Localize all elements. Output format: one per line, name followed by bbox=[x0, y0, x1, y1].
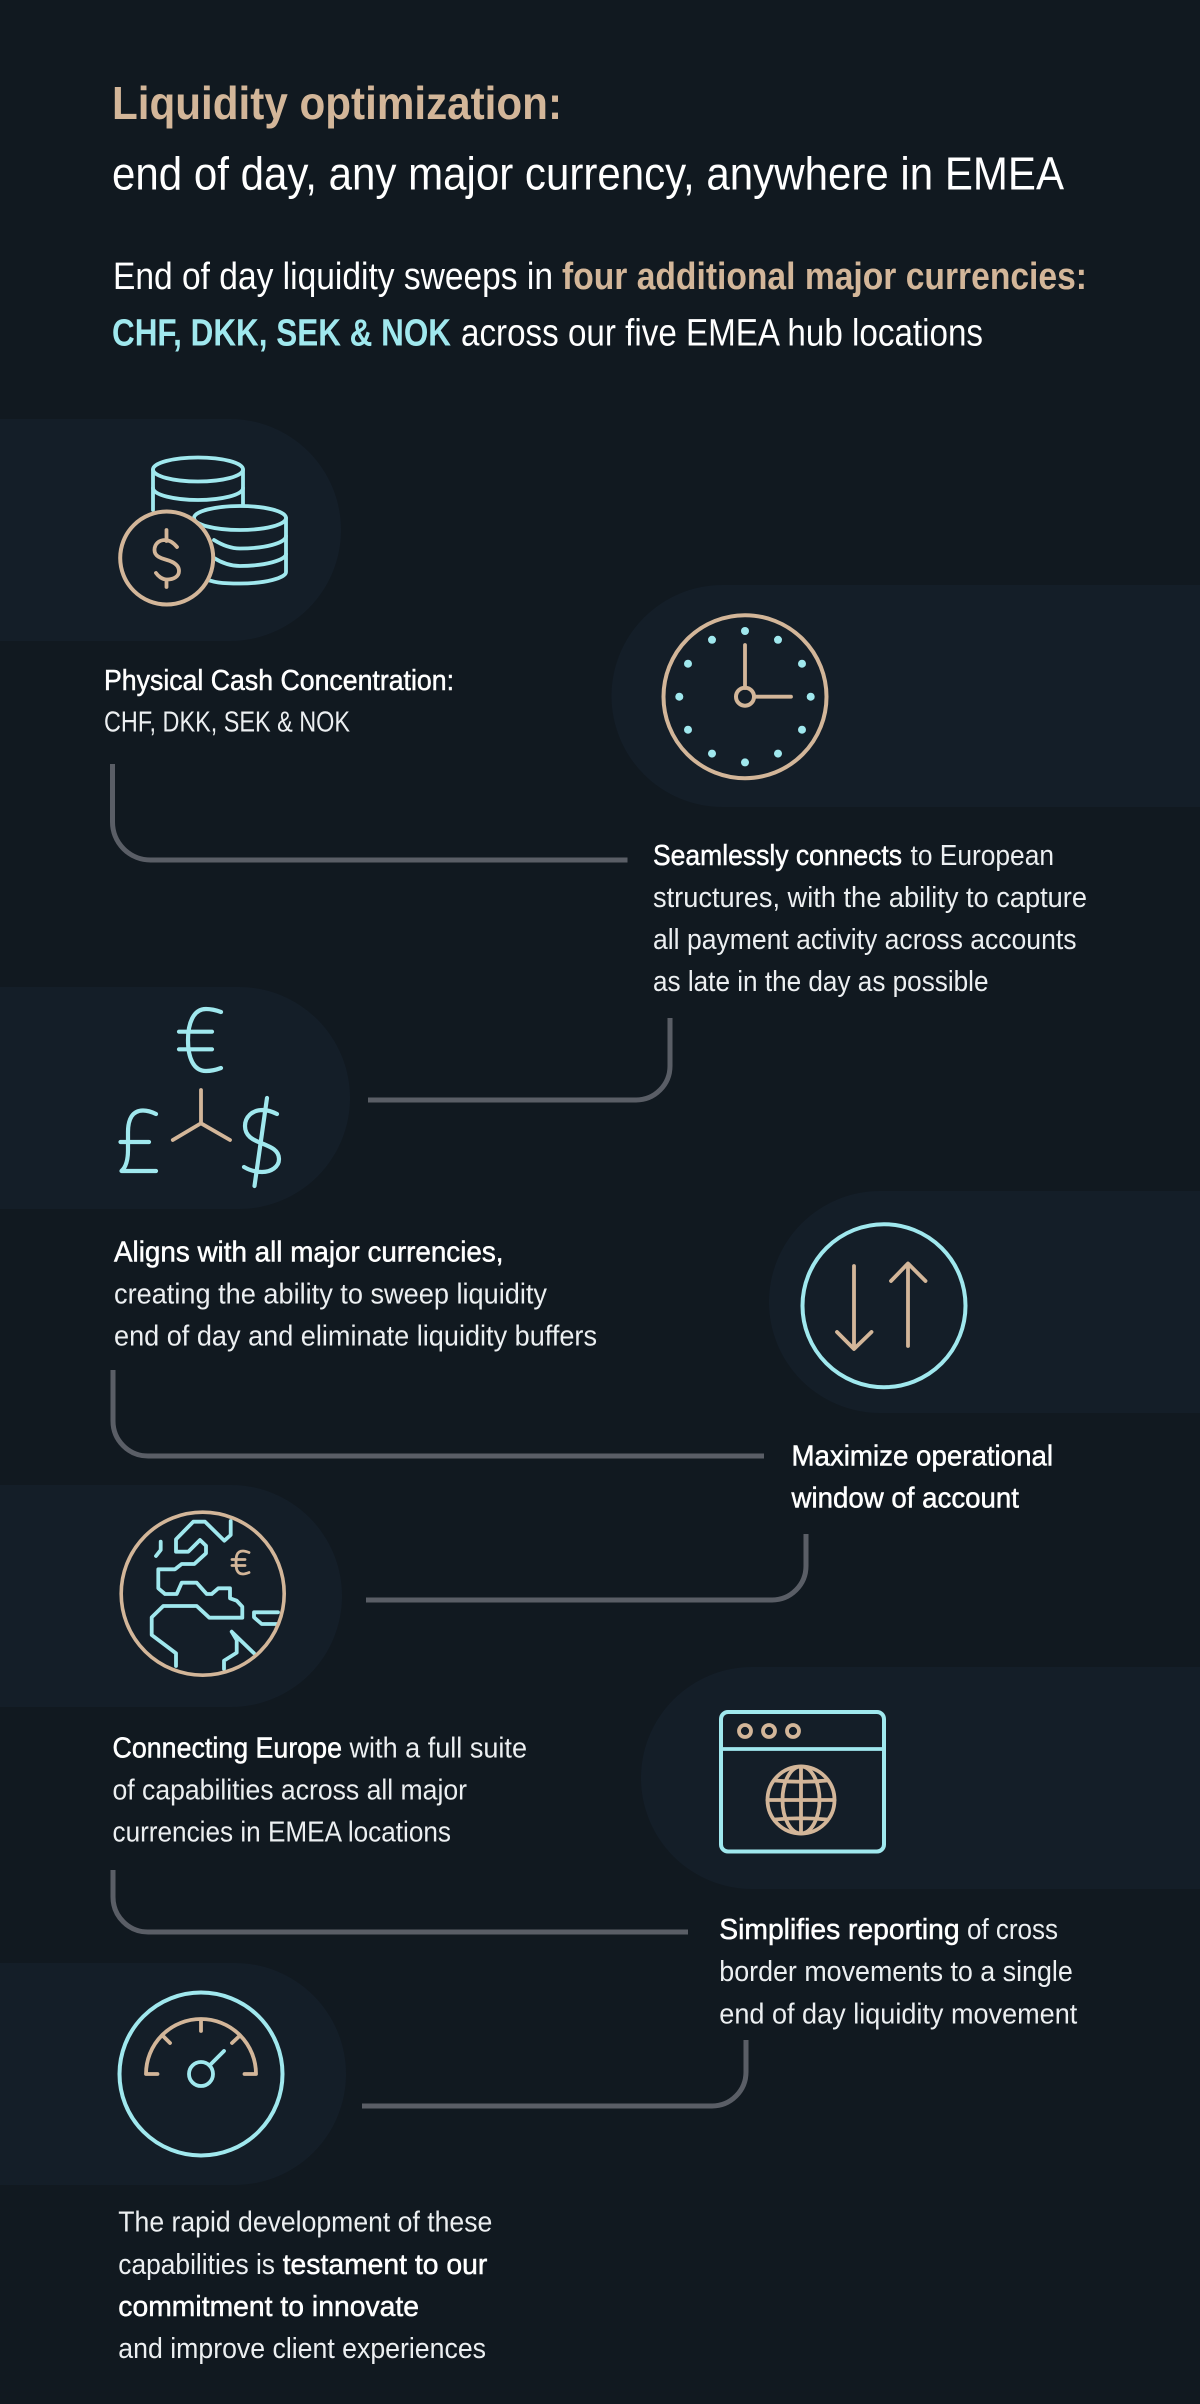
panel background bbox=[0, 987, 350, 1209]
icon: up and down arrows bbox=[802, 1224, 966, 1387]
panel background bbox=[0, 1485, 342, 1707]
panel: connecting europe bbox=[0, 1485, 527, 1849]
icon: currency symbols bbox=[120, 1009, 279, 1186]
text: maximize operational window: Maximize operational bbox=[792, 1441, 1053, 1473]
icon: globe with euro bbox=[121, 1512, 284, 1675]
text: commitment to innovate: The rapid development of these bbox=[118, 2207, 492, 2239]
panel: aligns with all major currencies bbox=[0, 987, 597, 1353]
text: connecting europe: with a full suite bbox=[349, 1733, 527, 1765]
connector arrow 2 bbox=[368, 1018, 670, 1100]
panel background bbox=[0, 1963, 346, 2185]
text: aligns with all major currencies: creating the ability to sweep liquidity bbox=[114, 1278, 547, 1310]
text: connecting europe: currencies in EMEA locations bbox=[112, 1817, 451, 1849]
text: aligns with all major currencies: end of day and eliminate liquidity buffers bbox=[114, 1321, 597, 1353]
text: commitment to innovate: testament to our bbox=[283, 2249, 488, 2281]
panel: physical cash concentration bbox=[0, 419, 454, 739]
text: commitment to innovate bbox=[118, 2207, 492, 2365]
panel: commitment to innovate bbox=[0, 1963, 492, 2365]
text: physical cash concentration: CHF, DKK, SEK & NOK bbox=[104, 707, 351, 739]
text: commitment to innovate: commitment to innovate bbox=[118, 2291, 419, 2323]
text: connecting europe: Connecting Europe bbox=[112, 1733, 342, 1765]
text: maximize operational window: window of account bbox=[791, 1483, 1019, 1515]
panel background bbox=[769, 1191, 1200, 1413]
text: seamlessly connects bbox=[653, 840, 1087, 998]
text: connecting europe: of capabilities across all major bbox=[112, 1775, 467, 1807]
text: seamlessly connects: Seamlessly connects bbox=[653, 840, 902, 872]
subtitle bbox=[112, 256, 1087, 354]
text: simplifies reporting: Simplifies reporting bbox=[719, 1914, 960, 1946]
panel: seamlessly connects bbox=[612, 585, 1200, 998]
text: simplifies reporting bbox=[719, 1914, 1077, 2030]
connector arrow 4 bbox=[366, 1534, 806, 1600]
connector arrow 6 bbox=[362, 2040, 746, 2106]
text: seamlessly connects: as late in the day as possible bbox=[653, 966, 988, 998]
connector arrow 3 bbox=[113, 1370, 764, 1456]
connector arrow 1 bbox=[112, 764, 628, 860]
title: Liquidity optimization: bbox=[112, 77, 562, 129]
panel background bbox=[0, 419, 341, 641]
subtitle: End of day liquidity sweeps in bbox=[113, 256, 553, 298]
text: commitment to innovate: and improve client experiences bbox=[118, 2333, 486, 2365]
subtitle: CHF, DKK, SEK & NOK bbox=[112, 312, 451, 354]
text: seamlessly connects: structures, with the ability to capture bbox=[653, 882, 1087, 914]
text: simplifies reporting: end of day liquidity movement bbox=[719, 1998, 1077, 2030]
text: physical cash concentration bbox=[104, 665, 454, 739]
text: seamlessly connects: to European bbox=[910, 840, 1054, 872]
title bbox=[112, 77, 1064, 200]
icon: clock bbox=[664, 615, 826, 778]
text: simplifies reporting: border movements to a single bbox=[719, 1956, 1073, 1988]
panel: simplifies reporting bbox=[641, 1667, 1200, 2030]
subtitle: four additional major currencies: bbox=[562, 256, 1087, 298]
text: physical cash concentration: Physical Cash Concentration: bbox=[104, 665, 454, 697]
subtitle: across our five EMEA hub locations bbox=[461, 312, 983, 354]
icon: coin stacks with dollar coin bbox=[120, 458, 286, 604]
text: aligns with all major currencies: Aligns with all major currencies, bbox=[114, 1237, 504, 1269]
text: simplifies reporting: of cross bbox=[967, 1914, 1058, 1946]
text: seamlessly connects: all payment activity across accounts bbox=[653, 924, 1076, 956]
panel background bbox=[641, 1667, 1200, 1889]
title: end of day, any major currency, anywhere in EMEA bbox=[112, 148, 1064, 200]
text: aligns with all major currencies bbox=[114, 1237, 597, 1353]
text: connecting europe bbox=[112, 1733, 527, 1849]
icon: browser window with globe bbox=[721, 1712, 884, 1852]
text: commitment to innovate: capabilities is bbox=[118, 2249, 275, 2281]
connector arrow 5 bbox=[113, 1870, 688, 1932]
text: maximize operational window bbox=[791, 1441, 1053, 1515]
panel background bbox=[612, 585, 1200, 807]
icon: speedometer gauge bbox=[120, 1992, 282, 2156]
panel: maximize operational window bbox=[769, 1191, 1200, 1515]
